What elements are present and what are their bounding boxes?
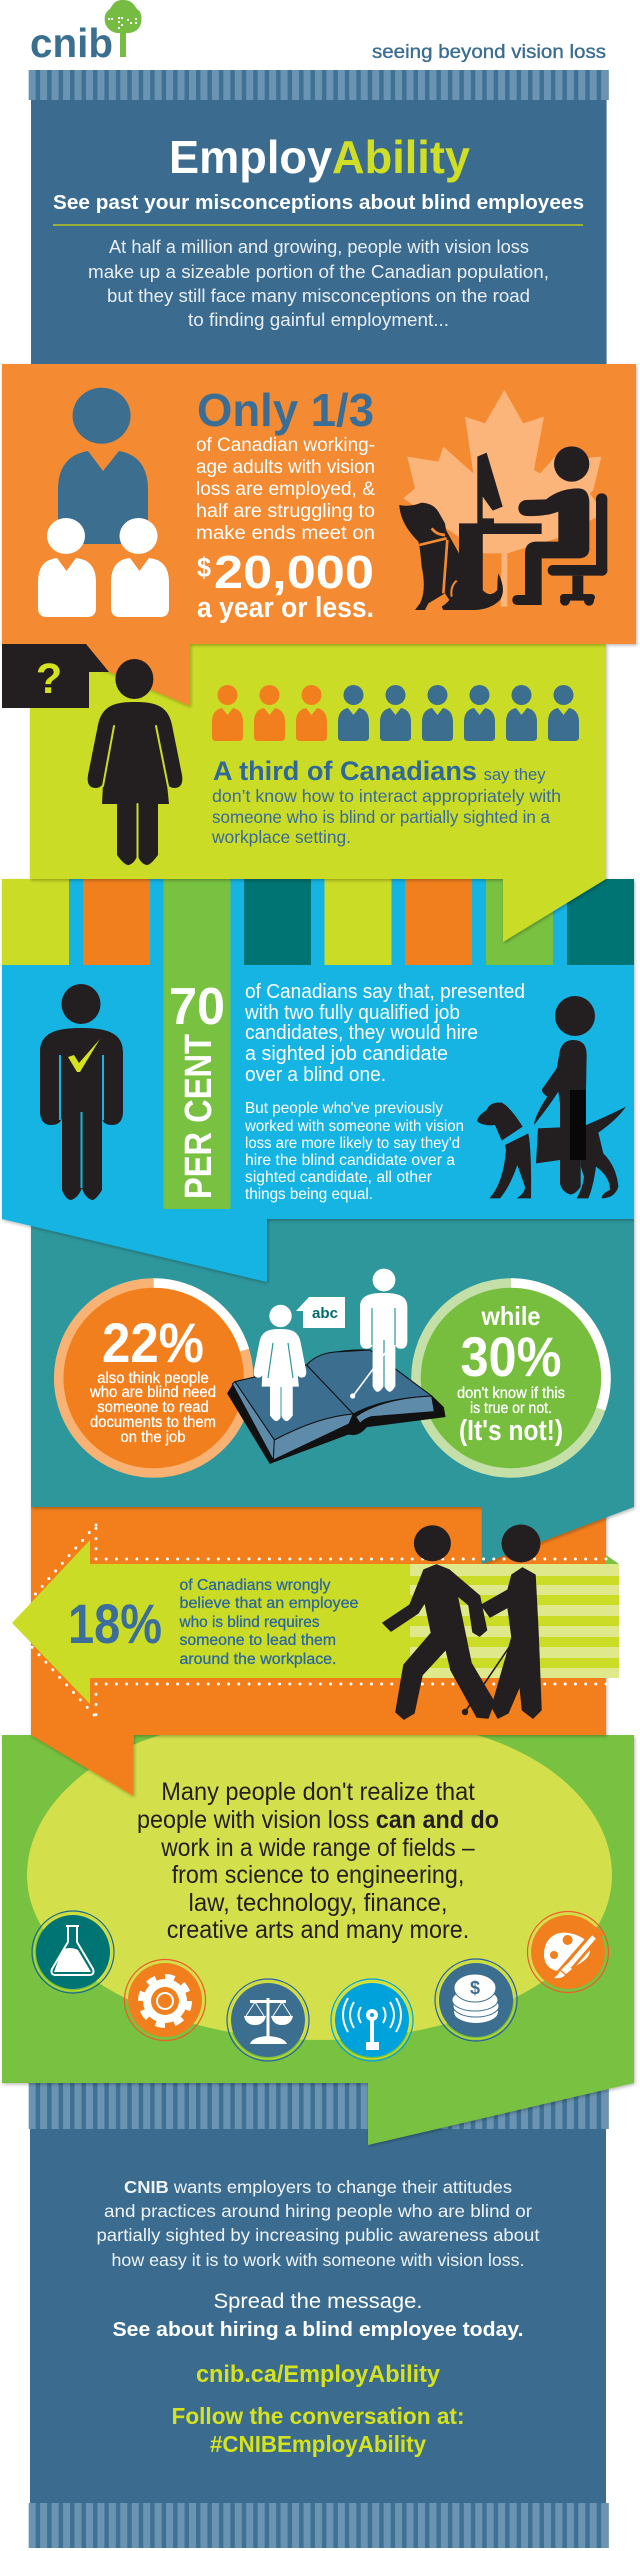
footer body text: CNIB wants employers to change their attitudes: [124, 2177, 512, 2197]
figure: white woman on book: [254, 1305, 306, 1421]
20,000 dollars: [197, 546, 374, 624]
lime arrow: [12, 1540, 619, 1704]
18 per cent text: around the workplace.: [180, 1651, 336, 1668]
cyan background with tail: [2, 879, 634, 1282]
circle: 30 per cent: while: [481, 1301, 540, 1331]
panel: 22 and 30 per cent: [31, 1219, 634, 1564]
secondary 70 per cent text: sighted candidate, all other: [245, 1169, 433, 1186]
call to action links: Follow the conversation at:: [172, 2403, 464, 2429]
18 per cent text: [179, 1577, 359, 1668]
third of Canadians text: [211, 756, 561, 847]
statement text: people with vision loss can and do: [137, 1806, 499, 1834]
call to action links: [172, 2361, 464, 2457]
panel: header introduction: [29, 70, 609, 364]
subtitle: See past your misconceptions about blind employees: [53, 192, 584, 214]
footer body text: [96, 2177, 540, 2270]
circle: 30 per cent: is true or not.: [470, 1400, 552, 1417]
introduction text: to finding gainful employment...: [188, 310, 449, 330]
only 1/3 text: age adults with vision: [196, 457, 375, 478]
only 1/3 text: of Canadian working-: [196, 435, 375, 456]
secondary 70 per cent text: loss are more likely to say they'd: [245, 1135, 460, 1152]
third of Canadians text: A third of Canadians: [213, 756, 477, 786]
circle: 22 per cent: someone to read: [97, 1399, 209, 1416]
statement text: from science to engineering,: [172, 1861, 464, 1889]
introduction text: but they still face many misconceptions on the road: [107, 286, 530, 306]
18 per cent text: who is blind requires: [179, 1614, 320, 1631]
circle: 22 per cent: 22%: [102, 1311, 204, 1374]
logo: cnib: [30, 0, 142, 66]
spread the message: Spread the message.: [214, 2290, 422, 2313]
pale stripes on arrow shaft: [410, 1564, 619, 1678]
teal background with tail: [31, 1219, 634, 1564]
footer body text: how easy it is to work with someone with vision loss.: [112, 2250, 524, 2270]
icon: coins: [435, 1959, 517, 2041]
secondary 70 per cent text: But people who've previously: [245, 1100, 443, 1117]
logo: cnib: cnib: [30, 20, 113, 66]
figure: white man with cane: [350, 1269, 407, 1399]
circle: 30 per cent: 30%: [460, 1325, 562, 1388]
figure: man with check mark: [40, 984, 123, 1200]
statement text: creative arts and many more.: [167, 1916, 469, 1944]
footer top stripes: [29, 2083, 609, 2129]
statement text: Many people don't realize that: [161, 1778, 475, 1806]
footer bottom stripes: [29, 2503, 609, 2548]
18 per cent text: of Canadians wrongly: [180, 1577, 330, 1594]
20,000 dollars: 20,000: [214, 546, 374, 598]
icon: scales: [227, 1979, 309, 2061]
circle: 22 per cent: also think people: [97, 1370, 209, 1387]
two white people: [38, 518, 169, 617]
footer body text: and practices around hiring people who are blind or: [104, 2201, 532, 2221]
subtitle rule: [53, 224, 583, 226]
circle: 22 per cent: who are blind need: [89, 1384, 216, 1401]
icon: paint palette: [528, 1912, 608, 1992]
people row: three of nine: [212, 685, 579, 741]
statement text: [137, 1778, 499, 1944]
orange background with tail: [2, 364, 636, 706]
coloured columns: [2, 879, 634, 965]
icon: gear: [124, 1960, 206, 2040]
only 1/3 text: make ends meet on: [196, 523, 375, 544]
secondary 70 per cent text: worked with someone with vision: [244, 1118, 464, 1135]
circle: 30 per cent: [416, 1283, 606, 1473]
maple leaf: [403, 390, 603, 607]
20,000 dollars: $: [197, 552, 211, 583]
secondary 70 per cent text: hire the blind candidate over a: [245, 1152, 455, 1169]
20,000 dollars: a year or less.: [197, 592, 374, 624]
main 70 per cent text: of Canadians say that, presented: [245, 980, 525, 1003]
main 70 per cent text: over a blind one.: [245, 1063, 386, 1086]
spread the message: See about hiring a blind employee today.: [112, 2319, 524, 2341]
big blue person: [58, 388, 148, 544]
panel: only one third: [2, 364, 636, 706]
blue background: [31, 100, 607, 364]
green fold: [606, 1555, 619, 1564]
statement text: law, technology, finance,: [188, 1889, 448, 1917]
circle: 22 per cent: on the job: [120, 1429, 186, 1446]
introduction text: At half a million and growing, people with vision loss: [109, 237, 529, 257]
footer background: [30, 2129, 606, 2503]
introduction text: [88, 237, 549, 330]
title: EmployAbility: [169, 131, 470, 183]
call to action links: #CNIBEmployAbility: [210, 2431, 426, 2457]
figure: person with guide dog: [477, 996, 626, 1198]
icon: coins: $: [470, 1978, 480, 1998]
main 70 per cent text: candidates, they would hire: [245, 1021, 478, 1044]
circle: 22 per cent: documents to them: [90, 1414, 216, 1431]
speech bubble: question mark: ?: [36, 655, 62, 703]
dotted arrow with 18 per cent: [10, 1525, 619, 1717]
spread the message: [112, 2290, 524, 2341]
panel: fields of work: [2, 1735, 634, 2145]
orange background with tail: [31, 1507, 606, 1796]
speech bubble: abc: abc: [312, 1305, 338, 1322]
footer panel: [29, 2083, 609, 2548]
tagline: seeing beyond vision loss: [372, 42, 606, 63]
circle: 22 per cent: [59, 1283, 249, 1473]
third of Canadians text: don’t know how to interact appropriately with: [212, 786, 561, 806]
icon: tree: [105, 0, 142, 57]
70 per cent banner: 70: [169, 978, 225, 1036]
call to action links: cnib.ca/EmployAbility: [196, 2361, 441, 2388]
70 per cent banner: [164, 879, 230, 1209]
statement text: work in a wide range of fields –: [160, 1834, 475, 1862]
main 70 per cent text: [244, 980, 525, 1086]
only 1/3 text: [196, 435, 375, 544]
speech bubble: abc: [296, 1297, 345, 1328]
18 per cent text: believe that an employee: [180, 1595, 359, 1612]
light ellipse: [27, 1735, 612, 2040]
only 1/3 text: half are struggling to: [196, 501, 375, 522]
panel: a third of Canadians: [30, 644, 606, 942]
main 70 per cent text: with two fully qualified job: [244, 1001, 460, 1024]
third of Canadians text: say they: [484, 765, 546, 784]
third of Canadians text: workplace setting.: [211, 827, 351, 847]
introduction text: make up a sizeable portion of the Canadian population,: [88, 262, 549, 282]
only 1/3 heading: Only 1/3: [197, 384, 374, 436]
panel: 70 per cent: [2, 879, 634, 1282]
illustration: guide and blind person walking: [383, 1524, 541, 1719]
third of Canadians text: someone who is blind or partially sighted in a: [212, 807, 550, 827]
18 per cent figure: 18%: [68, 1592, 162, 1655]
icon: wireless antenna: [331, 1979, 413, 2061]
top stripes: [29, 70, 609, 100]
illustration: person and guide dog at computer: [399, 390, 607, 610]
circle: 30 per cent: (It's not!): [459, 1415, 563, 1447]
speech bubble: question mark: [2, 644, 109, 708]
dotted outline: [10, 1525, 606, 1717]
circle: 30 per cent: don't know if this: [457, 1385, 565, 1402]
panel: 18 per cent: [31, 1507, 619, 1796]
icon: flask: [32, 1911, 114, 1993]
18 per cent text: someone to lead them: [180, 1632, 336, 1649]
lime background with fold: [30, 644, 606, 942]
70 per cent banner: PER CENT: [178, 1034, 220, 1199]
figure: woman in black: [88, 659, 182, 865]
only 1/3 text: loss are employed, &: [196, 479, 375, 500]
footer body text: partially sighted by increasing public awareness about: [96, 2225, 540, 2245]
secondary 70 per cent text: things being equal.: [245, 1186, 373, 1203]
green background with tail: [2, 1735, 634, 2145]
main 70 per cent text: a sighted job candidate: [245, 1042, 448, 1065]
illustration: open book: [228, 1350, 445, 1463]
secondary 70 per cent text: [244, 1100, 464, 1203]
